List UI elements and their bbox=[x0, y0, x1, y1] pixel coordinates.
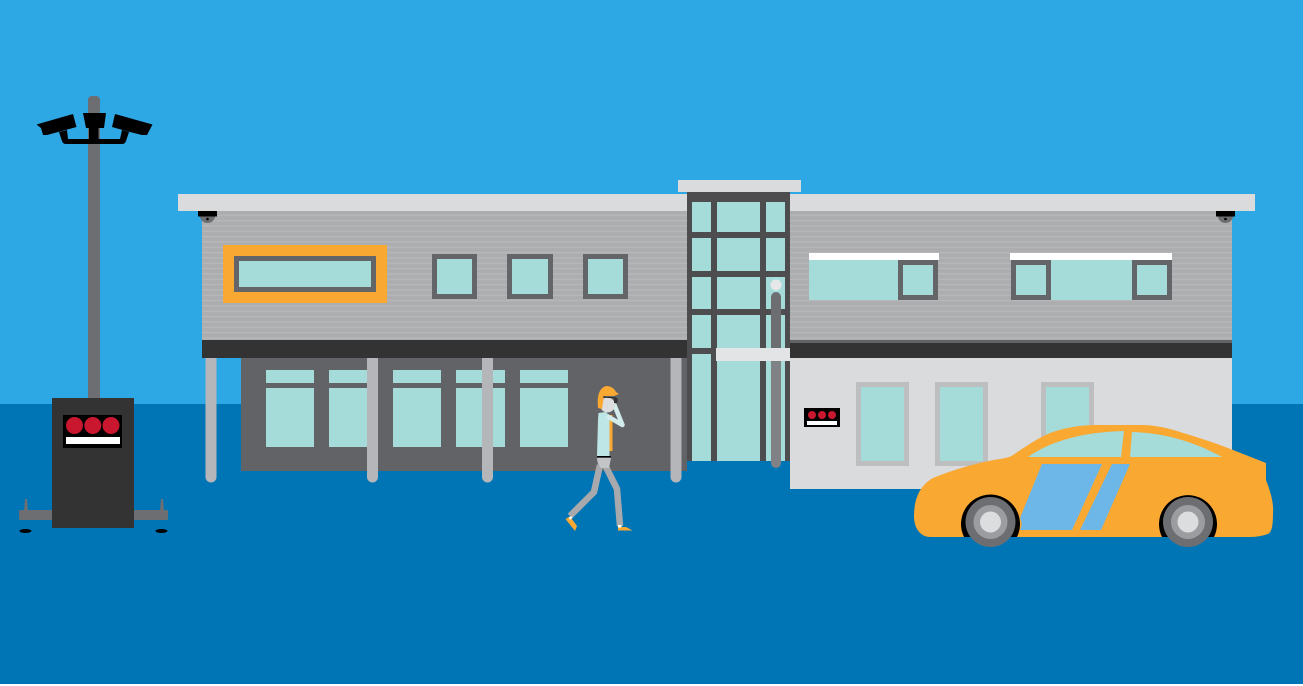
left wing floor band bbox=[202, 340, 688, 358]
icon: right dome camera bbox=[1216, 211, 1235, 223]
front wheel bbox=[961, 495, 1020, 547]
security tower bbox=[19, 96, 168, 533]
car bbox=[914, 425, 1273, 547]
icon: camera cluster bbox=[36, 113, 152, 144]
alarm panel bbox=[63, 415, 122, 448]
near leg bbox=[604, 463, 620, 526]
hips bbox=[597, 458, 611, 468]
building bbox=[178, 180, 1255, 489]
socks bbox=[569, 516, 622, 528]
left wing ground floor bbox=[241, 358, 687, 471]
left wing upper wall bbox=[202, 208, 688, 340]
tower feet bbox=[19, 499, 168, 533]
right wing ground floor windows bbox=[858, 384, 1092, 464]
right wing floor band bbox=[790, 340, 1232, 358]
wall alarm panel bbox=[804, 408, 840, 427]
head bbox=[600, 398, 615, 412]
entrance tower bbox=[678, 180, 801, 461]
door panel bbox=[1020, 464, 1102, 530]
tower base cabinet bbox=[52, 398, 134, 528]
right wing ground floor bbox=[790, 358, 1232, 489]
highlighted window bbox=[223, 245, 387, 303]
door accent bbox=[1080, 464, 1130, 530]
windshield bbox=[1130, 432, 1222, 457]
torso bbox=[597, 412, 610, 456]
right wing roof bbox=[790, 194, 1255, 211]
backpack strap bbox=[608, 415, 612, 451]
ground floor windows bbox=[266, 370, 568, 447]
rear wheel bbox=[1159, 495, 1217, 547]
phone bbox=[614, 398, 618, 403]
upper left square windows bbox=[434, 256, 626, 296]
right wing upper wall bbox=[790, 208, 1232, 341]
far leg bbox=[570, 465, 600, 516]
support pillars bbox=[206, 358, 682, 482]
upper right window group one bbox=[809, 253, 939, 300]
car body bbox=[914, 425, 1273, 537]
hard hat hair bbox=[598, 386, 619, 409]
icon: left dome camera bbox=[198, 211, 217, 223]
left wing roof bbox=[178, 194, 688, 211]
person on phone walking bbox=[566, 386, 632, 531]
ground bbox=[0, 404, 1303, 684]
rear side window bbox=[1028, 431, 1124, 457]
arm bbox=[607, 404, 622, 425]
shoes bbox=[566, 516, 632, 531]
entrance awning bbox=[716, 348, 790, 361]
belt bbox=[597, 456, 611, 457]
sky bbox=[0, 0, 1303, 404]
tower pole bbox=[88, 96, 100, 400]
lamp post bbox=[770, 280, 782, 468]
upper right window group two bbox=[1010, 253, 1172, 300]
glasses bbox=[603, 397, 616, 398]
